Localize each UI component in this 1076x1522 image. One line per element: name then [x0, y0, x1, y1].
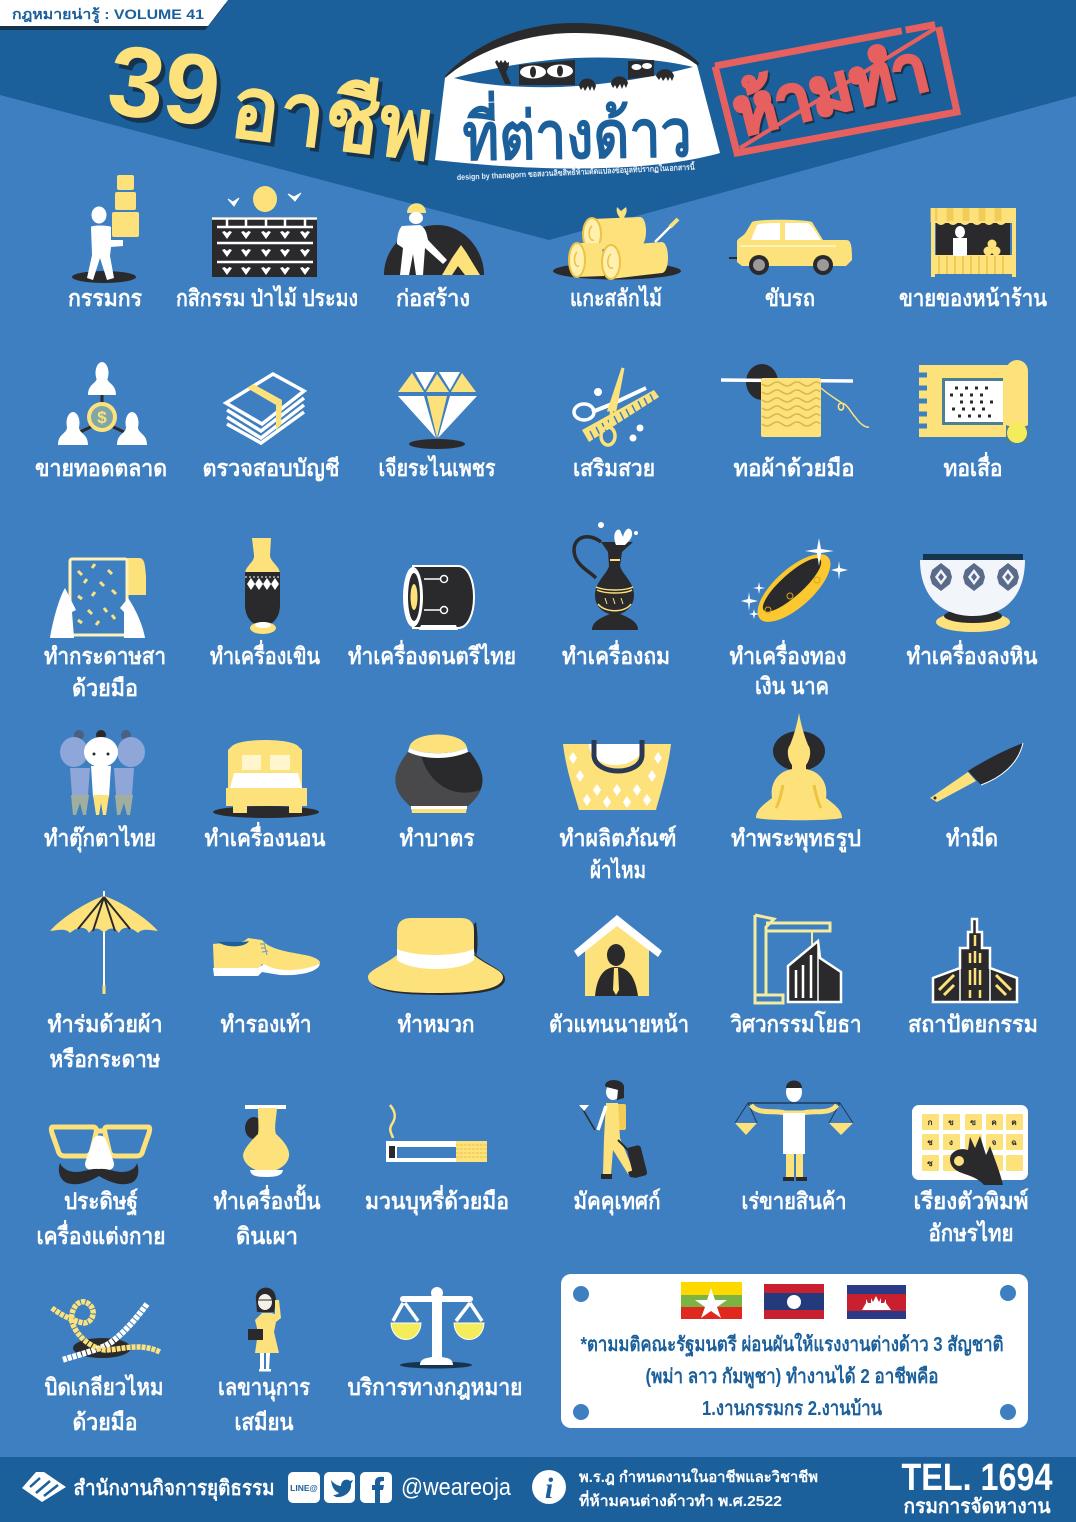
icon: rolled mat: [919, 360, 1028, 443]
icon: black lacquer vase: [245, 538, 280, 634]
label: two lines: ผ้าไหม: [590, 856, 646, 883]
icon: Thai type case and hand: ช: [927, 1138, 933, 1147]
icon: LINE: LINE@: [290, 1483, 318, 1493]
label: two lines: [44, 1373, 164, 1435]
label: ทำเครื่องลงหิน: [906, 639, 1038, 669]
occupation 25: umbrellas: [48, 891, 162, 1072]
note text: *ตามมติคณะรัฐมนตรี ผ่อนผันให้แรงงานต่างด้าว 3 สัญชาติ: [580, 1332, 1004, 1358]
note text: [580, 1332, 1004, 1420]
occupation 8: auditing: [202, 374, 340, 482]
label: two lines: ด้วยมือ: [72, 675, 138, 701]
title: 39 occupations: 39: [102, 24, 226, 148]
title: 39 occupations: อาชีพ: [226, 57, 438, 179]
flag: Myanmar: [681, 1282, 742, 1319]
label: ทำบาตร: [400, 825, 475, 851]
icon: shoe: [213, 938, 320, 976]
law citation: ที่ห้ามคนต่างด้าวทำ พ.ศ.2522: [579, 1490, 782, 1510]
occupation 4: wood carving: [553, 207, 681, 311]
occupation 22: silk products: [560, 740, 676, 883]
icon: Thai type case and hand: ฅ: [1011, 1118, 1017, 1127]
title: 39 occupations: อาชีพ: [230, 61, 442, 183]
icon: Thai type case and hand: ก: [928, 1118, 933, 1127]
footer bar: [0, 1457, 1076, 1522]
icon: Thai type case and hand: [912, 1105, 1028, 1185]
icon: Thai type case and hand: ฉ: [1011, 1138, 1017, 1147]
header background: [0, 0, 1076, 240]
title badge: peeking eye: ที่ต่างด้าว: [462, 86, 692, 174]
icon: silk handbag: [563, 740, 671, 810]
icon: three Thai dolls: [60, 730, 145, 815]
note text: 1.งานกรรมกร 2.งานบ้าน: [702, 1397, 882, 1420]
title: 39 occupations: [102, 24, 442, 183]
icon: gold bangle with sparkles: [741, 538, 848, 633]
label: two lines: เรียงตัวพิมพ์: [914, 1188, 1028, 1214]
icon: handmade paper held by hands: [50, 558, 146, 638]
icon: worker with shovel: [384, 203, 484, 275]
icon: labourer carrying boxes: [72, 175, 139, 283]
label: two lines: ประดิษฐ์: [64, 1188, 138, 1216]
icon: bronze bowl: [920, 554, 1025, 632]
label: มัคคุเทศก์: [574, 1188, 660, 1216]
occupation 32: pottery: [214, 1105, 321, 1249]
icon: knitting: [721, 364, 869, 437]
label: ทำหมวก: [398, 1011, 474, 1037]
label: ตัวแทนนายหน้า: [549, 1011, 689, 1037]
label: ตรวจสอบบัญชี: [202, 455, 340, 482]
label: two lines: บิดเกลียวไหม: [44, 1373, 164, 1400]
hotline: กรมการจัดหางาน: [904, 1496, 1051, 1518]
label: two lines: อักษรไทย: [928, 1219, 1014, 1246]
occupation 20: bedding: [204, 740, 326, 851]
series tag: [0, 0, 228, 30]
label: two lines: ดินเผา: [236, 1223, 298, 1249]
hotline: [902, 1457, 1052, 1518]
occupation 38: secretary and clerk: [218, 1288, 311, 1435]
label: มวนบุหรี่ด้วยมือ: [365, 1184, 509, 1216]
series tag: กฎหมายน่ารู้ : VOLUME 41: [12, 6, 204, 23]
occupation 17: gold and silver work: [730, 538, 848, 699]
occupation 7: auction: [35, 362, 167, 481]
icon: information: [532, 1470, 566, 1505]
label: ทำเครื่องถม: [562, 639, 670, 669]
label: ทำเครื่องดนตรีไทย: [348, 639, 516, 669]
occupation 34: tour guide: [574, 1080, 660, 1216]
icon: peddler with carrying pole: [735, 1080, 853, 1181]
occupation 36: typesetting: [912, 1105, 1028, 1246]
label: two lines: เครื่องแต่งกาย: [36, 1219, 166, 1249]
label: two lines: [214, 1184, 321, 1249]
icon: farm field with sun: [212, 186, 317, 277]
social handle: @weareoja: [401, 1474, 512, 1501]
label: ขับรถ: [765, 285, 815, 311]
occupation 9: gem cutting: [378, 372, 496, 481]
label: two lines: เงิน นาค: [755, 673, 829, 699]
icon: information: i: [545, 1472, 554, 1505]
icon: Thai type case and hand: ข: [948, 1118, 954, 1127]
occupation 6: shop vendor: [899, 208, 1047, 311]
occupation 1: labourer: [68, 175, 143, 311]
stamp: prohibited: ห้ามทำ: [727, 32, 938, 152]
icon: ewer with splash: [574, 522, 638, 630]
icon: Thai type case and hand: ซ: [927, 1159, 933, 1168]
icon: network of people with dollar: $: [97, 408, 107, 427]
label: two lines: ทำเครื่องทอง: [730, 639, 846, 669]
label: ทำเครื่องนอน: [204, 821, 326, 851]
panel: cabinet exemption note: [561, 1274, 1028, 1428]
icon: market stall: [931, 208, 1016, 277]
flag: Laos: [764, 1284, 824, 1319]
icon: umbrella: [50, 891, 158, 994]
icon: secretary: [248, 1288, 281, 1372]
label: บริการทางกฎหมาย: [348, 1374, 522, 1400]
law citation: [579, 1468, 818, 1510]
label: แกะสลักไม้: [570, 284, 662, 311]
occupation 19: Thai dolls: [44, 730, 156, 853]
label: กรรมกร: [68, 285, 143, 311]
icon: carved logs: [553, 207, 681, 280]
label: two lines: [44, 643, 166, 701]
label: two lines: เลขานุการ: [218, 1374, 311, 1402]
icon: Buddha statue: [756, 713, 842, 820]
icon: Thai type case and hand: ฃ: [970, 1118, 976, 1127]
occupation 16: niello ware: [562, 522, 670, 669]
occupation 18: bronze ware: [906, 554, 1038, 669]
occupation 12: mat weaving: [919, 360, 1028, 481]
occupation 23: Buddha images: [731, 713, 861, 853]
label: สถาปัตยกรรม: [908, 1011, 1038, 1037]
occupation 2: farming, forestry, fishery: [176, 186, 358, 311]
icon: bed: [213, 740, 319, 818]
label: ทอผ้าด้วยมือ: [734, 455, 854, 481]
occupation 27: hats: [368, 918, 505, 1037]
label: two lines: [36, 1188, 166, 1249]
icon: cigarette with smoke: [386, 1105, 487, 1162]
flag: Cambodia: [847, 1285, 906, 1319]
occupation 29: civil engineering: [730, 915, 862, 1037]
label: วิศวกรรมโยธา: [730, 1010, 862, 1037]
icon: twisted silk: [52, 1302, 160, 1360]
occupation 35: peddler: [735, 1080, 853, 1214]
occupation 31: costume accessories: [36, 1127, 166, 1249]
icon: Thai type case and hand: ง: [949, 1138, 953, 1147]
label: two lines: เสมียน: [234, 1409, 294, 1435]
label: two lines: ทำเครื่องปั้น: [214, 1184, 321, 1214]
icon: disguise glasses and moustache: [51, 1127, 150, 1184]
icon: drum: [403, 566, 474, 630]
occupation 39: legal services: [348, 1287, 522, 1400]
title: 39 occupations: 39: [106, 29, 230, 153]
label: two lines: หรือกระดาษ: [50, 1046, 160, 1072]
label: two lines: [560, 825, 676, 883]
occupation 5: driving: [729, 220, 852, 311]
icon: diamond: [398, 372, 477, 449]
icon: scales of justice: [391, 1287, 484, 1368]
icon: car: [729, 220, 852, 275]
label: กสิกรรม ป่าไม้ ประมง: [176, 284, 358, 311]
credit line: design by thanagorn ขอสงวนลิขสิทธิ์ห้ามดัดแปลงข้อมูลที่ปรากฏในเอกสารนี้: [457, 161, 696, 183]
label: เสริมสวย: [573, 455, 655, 481]
icon: Facebook: [360, 1472, 392, 1503]
occupation 28: brokers: [549, 915, 689, 1037]
occupation 13: sa paper making: [44, 558, 166, 701]
occupation 15: Thai musical instruments: [348, 566, 516, 669]
occupation 3: construction: [384, 203, 484, 311]
occupation 26: shoes: [213, 938, 320, 1037]
occupation 14: lacquerware: [210, 538, 320, 669]
label: two lines: ด้วยมือ: [72, 1409, 138, 1435]
icon: knife: [930, 743, 1023, 802]
law citation: พ.ร.ฎ กำหนดงานในอาชีพและวิชาชีพ: [579, 1468, 818, 1486]
hotline: TEL. 1694: [902, 1457, 1052, 1499]
icon: skyscraper: [933, 919, 1017, 1002]
icon: stack of banknotes: [226, 374, 304, 443]
label: two lines: ทำร่มด้วยผ้า: [48, 1011, 162, 1037]
organisation name: สำนักงานกิจการยุติธรรม: [74, 1477, 274, 1502]
occupation 10: hairdressing: [573, 368, 659, 481]
label: two lines: ทำผลิตภัณฑ์: [560, 825, 676, 851]
label: ขายของหน้าร้าน: [899, 285, 1047, 311]
icon: alms bowl: [395, 734, 483, 813]
occupation 24: knives: [930, 743, 1023, 851]
label: two lines: [48, 1011, 162, 1072]
icon: crane and buildings: [755, 915, 841, 1003]
label: เจียระไนเพชร: [378, 454, 496, 481]
icon: hat: [368, 918, 505, 995]
occupation 21: alms bowl: [395, 734, 483, 851]
icon: Twitter: [324, 1472, 355, 1503]
title badge: peeking eye: [435, 23, 720, 174]
note text: (พม่า ลาว กัมพูชา) ทำงานได้ 2 อาชีพคือ: [646, 1364, 938, 1390]
icon: LINE: [288, 1472, 320, 1503]
occupation 33: hand-rolled cigarettes: [365, 1105, 509, 1216]
label: ทำมีด: [946, 825, 998, 851]
label: ทอเสื่อ: [944, 451, 1002, 481]
icon: clay pot: [243, 1105, 289, 1177]
icon: comb and scissors: [574, 368, 659, 445]
label: ขายทอดตลาด: [35, 455, 167, 481]
stamp: prohibited: ห้ามทำ: [725, 30, 936, 150]
icon: Thai type case and hand: ค: [991, 1118, 997, 1127]
label: two lines: ทำกระดาษสา: [44, 643, 166, 669]
occupation 30: architecture: [908, 919, 1038, 1037]
icon: house with agent: [574, 915, 662, 996]
occupation 37: silk reeling: [44, 1302, 164, 1435]
label: ทำตุ๊กตาไทย: [44, 824, 156, 853]
label: ก่อสร้าง: [396, 285, 470, 311]
label: ทำเครื่องเขิน: [210, 639, 320, 669]
occupation 11: hand weaving: [721, 364, 869, 481]
label: two lines: [914, 1188, 1028, 1246]
icon: guide with suitcase: [579, 1080, 648, 1179]
label: เร่ขายสินค้า: [742, 1188, 846, 1214]
label: two lines: [218, 1374, 311, 1435]
label: ทำพระพุทธรูป: [731, 825, 861, 853]
label: ทำรองเท้า: [220, 1011, 312, 1037]
icon: Thai type case and hand: จ: [992, 1138, 997, 1147]
logo: Office of Justice Affairs: [22, 1472, 66, 1502]
label: two lines: [730, 639, 846, 699]
